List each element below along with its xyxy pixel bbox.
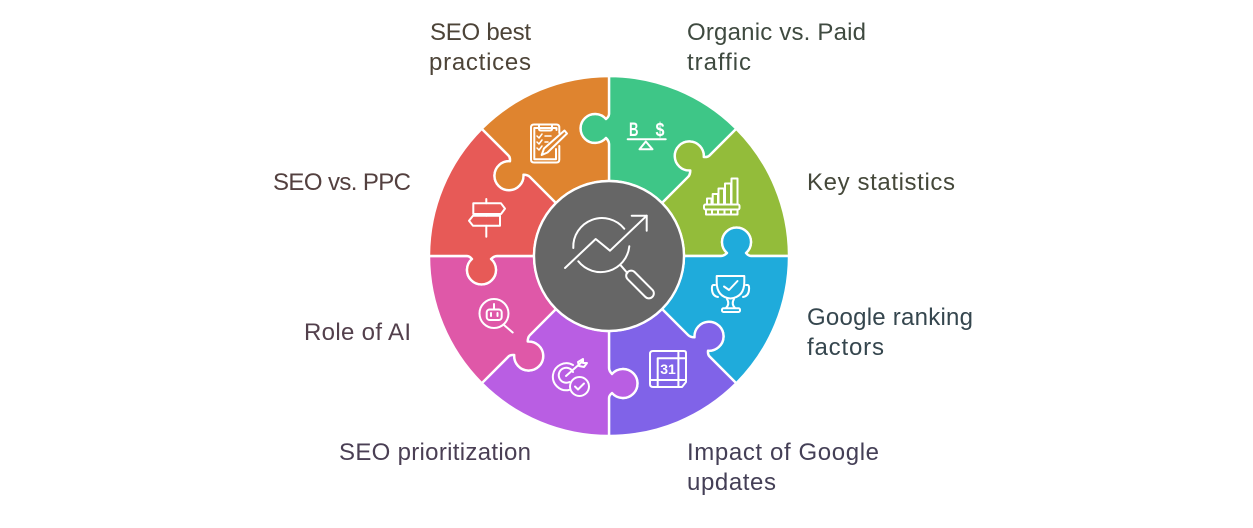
- panel: key statistics piece: [626, 109, 826, 309]
- label: seo best practices: practices: [429, 49, 531, 76]
- label: seo vs ppc: SEO vs. PPC: [273, 169, 411, 196]
- label: seo best practices: SEO best: [430, 19, 531, 46]
- icon: magnifier with trend arrow: [565, 216, 656, 300]
- label: key statistics: Key statistics: [807, 169, 955, 196]
- icon: calendar 31: 31: [660, 361, 676, 377]
- panel: role of ai piece: [392, 203, 592, 403]
- panel: seo vs ppc piece: [429, 129, 556, 284]
- label: organic vs paid traffic: Organic vs. Paid: [687, 19, 866, 46]
- icon: signpost: [469, 199, 505, 237]
- icon: balance scale with currencies: B: [629, 119, 638, 141]
- icon: clipboard with pencil: [531, 124, 567, 162]
- puzzle wheel: [392, 39, 826, 473]
- center hub circle: [534, 181, 684, 331]
- panel: seo prioritization piece: [482, 309, 637, 436]
- panel: impact of google updates piece: [556, 273, 756, 473]
- label: organic vs paid traffic: traffic: [687, 49, 751, 76]
- panel: seo best practices piece: [462, 39, 662, 239]
- panel: google ranking factors piece: [662, 228, 789, 383]
- label: google ranking factors: factors: [807, 334, 884, 361]
- icon: bar chart pan flute: [704, 178, 740, 214]
- label: seo prioritization: SEO prioritization: [339, 439, 531, 466]
- label: google ranking factors: Google ranking: [807, 304, 973, 331]
- icon: robot in magnifier: [480, 299, 513, 332]
- icon: calendar 31: [650, 351, 686, 387]
- icon: trophy with check: [712, 276, 749, 312]
- icon: balance scale with currencies: [628, 119, 666, 149]
- label: impact of google updates: Impact of Google: [687, 439, 879, 466]
- label: impact of google updates: updates: [687, 469, 776, 496]
- label: role of ai: Role of AI: [304, 319, 411, 346]
- icon: balance scale with currencies: $: [656, 119, 665, 141]
- panel: organic vs paid piece: [581, 76, 736, 203]
- icon: target with arrow and check: [553, 359, 589, 396]
